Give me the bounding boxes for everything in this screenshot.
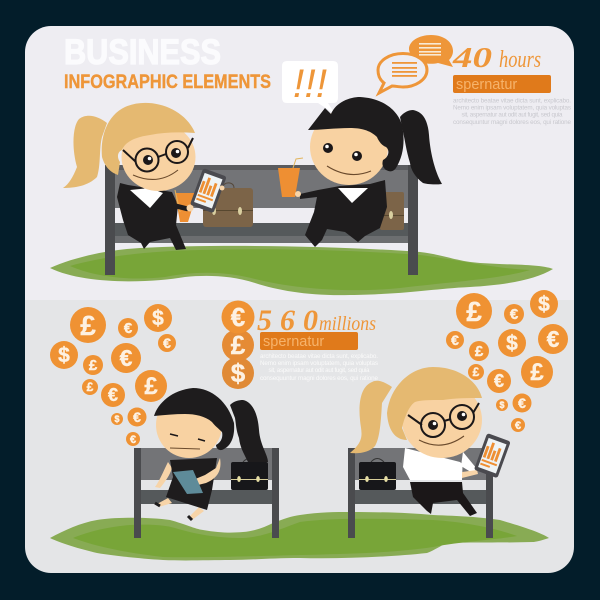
text block: bottom paragraph: sit, aspernatur aut odit aut fugit, sed quia bbox=[268, 367, 370, 374]
coins: right cloud bbox=[446, 290, 568, 432]
coins: left cloud: $ bbox=[58, 344, 70, 367]
text: 560 millions: millions bbox=[319, 313, 376, 335]
coins: left cloud: £ bbox=[144, 373, 158, 400]
coins: right cloud: € bbox=[547, 326, 560, 352]
character: blonde woman with tablet bbox=[63, 103, 227, 250]
panel: bottom grass bbox=[50, 512, 549, 560]
coins: left cloud: € bbox=[120, 345, 133, 371]
coins: left cloud: $ bbox=[152, 307, 164, 330]
subtitle: infographic elements: INFOGRAPHIC ELEMENTS bbox=[64, 72, 271, 93]
text: 40 hours: 40 bbox=[452, 43, 492, 74]
coins: right cloud: € bbox=[510, 306, 519, 323]
coins: left cloud: € bbox=[124, 320, 133, 337]
coins: centre stack bbox=[222, 300, 254, 389]
text block: bottom paragraph: architecto beatae vitae dicta sunt, explicabo. bbox=[260, 353, 378, 360]
character: blonde woman with white shirt and tablet bbox=[350, 367, 511, 516]
panel: top bench bbox=[105, 165, 418, 275]
coins: left cloud: $ bbox=[114, 414, 120, 424]
title: business: BUSINESS bbox=[64, 33, 221, 72]
text block: bottom paragraph: consequuntur magni dolores eos, qui ratione bbox=[260, 375, 378, 382]
text: 40 hours bbox=[452, 43, 541, 74]
icon: brown briefcase centre bbox=[203, 183, 253, 227]
icon: black briefcase right bbox=[359, 458, 396, 490]
coins: right cloud: € bbox=[515, 420, 521, 432]
coins: right cloud: £ bbox=[473, 365, 480, 379]
icon: exclamation speech box: !!! bbox=[293, 62, 327, 106]
label bar: spernatur top: spernatur bbox=[456, 77, 517, 93]
panel: top scene grass bbox=[50, 246, 553, 295]
character: sleepy dark haired woman bbox=[154, 388, 268, 520]
coins: right cloud: € bbox=[494, 371, 504, 391]
coins: left cloud: € bbox=[130, 434, 136, 446]
text block: top paragraph: consequuntur magni dolores eos, qui ratione bbox=[453, 119, 571, 126]
label bar: spernatur bottom bbox=[260, 332, 358, 350]
coins: right cloud: € bbox=[518, 395, 526, 411]
label bar: spernatur top bbox=[453, 75, 551, 93]
coins: left cloud bbox=[50, 304, 176, 446]
panel: bottom left bench bbox=[134, 448, 279, 538]
panel: bottom right bench bbox=[348, 448, 493, 538]
coins: centre stack: £ bbox=[231, 330, 246, 360]
text block: top paragraph bbox=[453, 98, 571, 126]
coins: centre stack: $ bbox=[231, 358, 246, 388]
coins: right cloud: £ bbox=[466, 296, 482, 327]
text block: top paragraph: sit, aspernatur aut odit aut fugit, sed quia bbox=[462, 112, 563, 118]
character: dark haired woman with cup bbox=[278, 97, 442, 247]
icon: brown briefcase right bbox=[380, 192, 404, 230]
coins: left cloud: € bbox=[108, 385, 118, 405]
coins: right cloud: $ bbox=[538, 293, 550, 316]
text block: top paragraph: Nemo enim ipsam voluptatem, quia voluptas bbox=[453, 104, 571, 112]
coins: right cloud: £ bbox=[530, 359, 544, 386]
coins: centre stack: € bbox=[231, 302, 245, 332]
icon: speech bubbles bbox=[378, 35, 453, 93]
coins: left cloud: £ bbox=[89, 357, 98, 374]
text block: bottom paragraph: Nemo enim ipsam voluptatem, quia voluptas bbox=[260, 360, 378, 367]
text: 560 millions: 560 bbox=[257, 304, 318, 337]
text block: bottom paragraph bbox=[260, 353, 378, 382]
coins: right cloud: $ bbox=[499, 400, 505, 410]
coins: left cloud: £ bbox=[80, 310, 96, 341]
coins: left cloud: € bbox=[163, 335, 171, 351]
text: 40 hours: hours bbox=[499, 47, 541, 73]
coins: right cloud: € bbox=[451, 332, 459, 348]
label bar: spernatur bottom: spernatur bbox=[263, 334, 324, 350]
coins: left cloud: £ bbox=[87, 380, 94, 394]
icon: exclamation speech box bbox=[282, 61, 338, 114]
coins: left cloud: € bbox=[133, 409, 141, 425]
coins: right cloud: $ bbox=[506, 332, 518, 355]
text block: top paragraph: architecto beatae vitae dicta sunt, explicabo. bbox=[453, 98, 571, 104]
coins: right cloud: £ bbox=[475, 343, 484, 360]
text: 560 millions bbox=[257, 304, 376, 337]
icon: black briefcase left bbox=[231, 458, 268, 490]
